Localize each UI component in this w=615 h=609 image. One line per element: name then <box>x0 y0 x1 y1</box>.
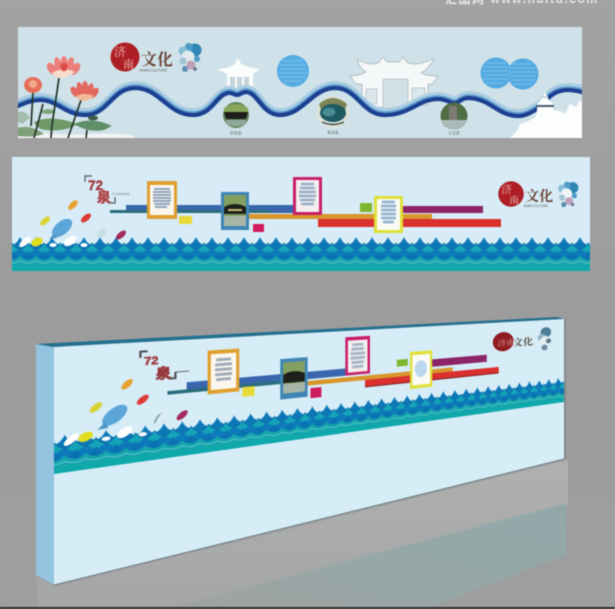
wall timeline bars <box>167 351 499 414</box>
wall heading: 72 springs <box>140 349 189 384</box>
heading: 72 springs: 72 SPRINGS <box>112 192 130 196</box>
panel: 72 springs flat design <box>12 157 590 271</box>
wall orange frame <box>208 349 239 394</box>
wall logo: 济南 <box>498 336 515 349</box>
photo: spring pavilion <box>223 102 249 136</box>
wall logo <box>493 327 551 355</box>
logo: Jinan culture: JINAN CULTURE <box>523 204 548 208</box>
white gate archway <box>350 57 438 111</box>
wall artwork in perspective <box>53 326 565 475</box>
white pavilion <box>218 58 260 88</box>
wall photo frame <box>280 357 308 400</box>
wall logo: 文化 <box>513 334 533 349</box>
leaping fish and splashes <box>18 199 128 249</box>
wall heading: 72 springs: 72 <box>153 377 171 394</box>
wall yellow frame <box>410 350 432 389</box>
blue circular text plaques <box>277 55 538 90</box>
wall ocean waves <box>54 377 564 474</box>
photo: park scene <box>440 102 468 136</box>
photo: park scene: 五龙潭 <box>448 130 460 136</box>
logo: Jinan culture: 文化 <box>141 47 173 70</box>
wall pink frame <box>345 336 370 376</box>
3D wall body <box>36 317 565 585</box>
logo: Jinan culture: 济 <box>114 43 126 60</box>
pink text frame <box>293 177 322 215</box>
photo: spring pool <box>317 96 349 135</box>
logo: Jinan culture <box>110 42 202 72</box>
timeline bars <box>110 203 501 232</box>
logo: Jinan culture: 南 <box>509 193 519 207</box>
logo: Jinan culture: JINAN CULTURE <box>139 68 168 72</box>
logo: Jinan culture <box>498 181 578 208</box>
wall heading: 72 springs: 泉 <box>167 390 186 414</box>
logo: Jinan culture: 济 <box>501 182 512 197</box>
photo: spring pavilion: 趵突泉 <box>230 130 242 136</box>
photo frame <box>221 192 249 230</box>
heading: 72 springs: 泉 <box>97 186 111 206</box>
blue flowing ribbon <box>18 86 582 116</box>
logo: Jinan culture: 南 <box>123 56 134 72</box>
heading: 72 springs <box>85 176 130 206</box>
wall fish and splashes <box>62 373 189 448</box>
yellow text frame <box>374 196 403 233</box>
ocean waves <box>12 237 590 271</box>
heading: 72 springs: 72 <box>88 178 103 193</box>
orange text frame <box>147 181 177 219</box>
photo: spring pool: 黑虎泉 <box>327 130 339 135</box>
lotus painting <box>18 56 134 138</box>
panel: lotus and wave design <box>18 27 582 138</box>
white town silhouette <box>510 92 582 138</box>
logo: Jinan culture: 文化 <box>525 186 553 206</box>
